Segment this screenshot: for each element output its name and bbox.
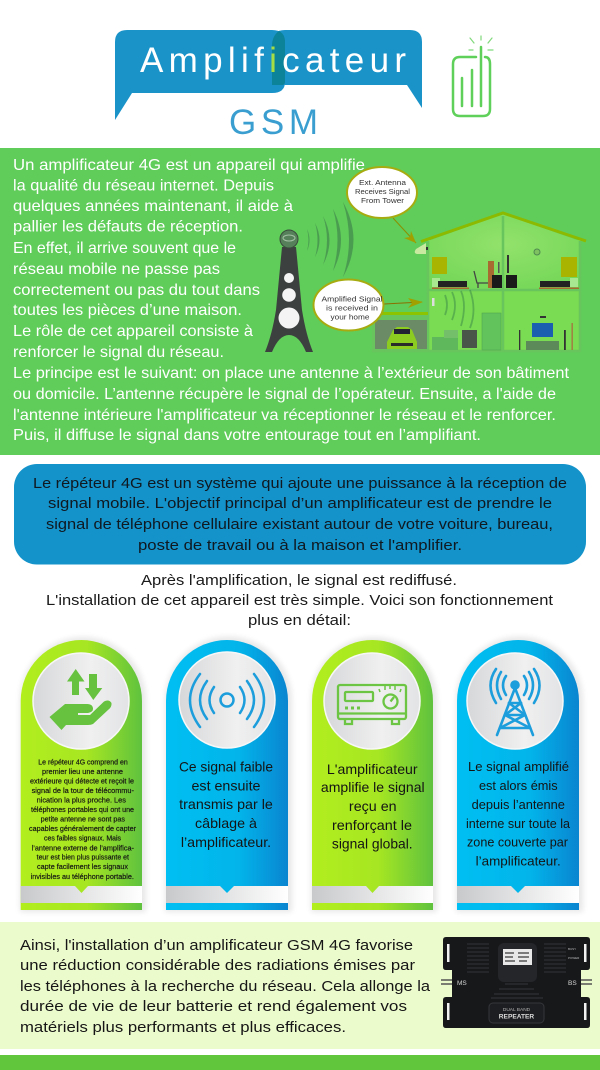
icon: hand with arrows bbox=[50, 669, 112, 730]
conclusion text: les téléphones à la recherche du réseau. Cela allonge la bbox=[20, 978, 431, 995]
card 4 text: zone couverte par bbox=[467, 834, 569, 850]
intro text: correctement ou pas du tout dans bbox=[13, 282, 260, 299]
card 3 text: reçu en bbox=[349, 799, 397, 814]
blue description text: Le répéteur 4G est un système qui ajoute une puissance à la réception de bbox=[33, 475, 567, 492]
card 1 text: nication la plus proche. Les bbox=[37, 795, 126, 804]
card 1 text: teur est bien plus puissante et bbox=[37, 853, 129, 862]
icon: signal bars phone bbox=[453, 36, 493, 116]
card 1: outdoor antenna bbox=[20, 637, 146, 912]
illustration: repeater device: DUAL BAND bbox=[503, 1007, 531, 1013]
intro text: Le rôle de cet appareil consiste à bbox=[13, 323, 253, 340]
port labels: MS bbox=[457, 980, 467, 987]
callout: external antenna: Receives Signal bbox=[355, 187, 410, 196]
speech bubble left bbox=[115, 30, 285, 120]
icon: radio mast bbox=[490, 669, 540, 735]
callout: amplified signal: is received in bbox=[326, 304, 378, 312]
callout: amplified signal: your home bbox=[330, 312, 370, 322]
blue description text: signal de téléphone cellulaire existant autour de votre voiture, bureau, bbox=[46, 516, 553, 533]
card 1 text: Le répéteur 4G comprend en bbox=[38, 757, 128, 766]
card 1 text: petite antenne ne sont pas bbox=[41, 815, 125, 824]
intro text: l'antenne intérieure l'amplificateur va réceptionner le réseau et le renforcer. bbox=[13, 407, 556, 424]
logo: Amplificateur GSM bbox=[115, 30, 422, 142]
intro text: Puis, il diffuse le signal dans votre entourage tout en l’amplifiant. bbox=[13, 427, 481, 444]
card 3 footer band bbox=[312, 886, 433, 903]
intro text: Le principe est le suivant: on place une antenne à l’extérieur de son bâtiment bbox=[13, 365, 570, 382]
conclusion text: matériels plus performants et plus efficaces. bbox=[20, 1019, 346, 1036]
panel: conclusion bbox=[0, 922, 600, 1049]
card 4 text: l’amplificateur. bbox=[476, 854, 561, 868]
conclusion text: une réduction considérable des radiations émises par bbox=[20, 957, 415, 974]
card 1 footer band bbox=[21, 886, 142, 903]
card 3: amplifier bbox=[311, 637, 437, 912]
card 2: weak signal bbox=[165, 636, 292, 912]
card 1 text bbox=[29, 757, 137, 881]
card 1 text: premier lieu une antenne bbox=[42, 767, 123, 776]
text: after amplification: plus en détail: bbox=[248, 612, 351, 629]
blue description text bbox=[33, 475, 567, 554]
card 1 disc bbox=[33, 653, 129, 749]
illustration: repeater device bbox=[441, 937, 592, 1028]
illustration: repeater device: REPEATER bbox=[499, 1014, 534, 1020]
card 1 text: ces faibles signaux. Mais bbox=[44, 834, 121, 843]
garage bbox=[372, 312, 428, 316]
card 3 text bbox=[321, 762, 425, 852]
label plate bbox=[489, 1003, 544, 1023]
living room bbox=[532, 323, 553, 337]
blue description text: poste de travail ou à la maison et l'amplifier. bbox=[138, 537, 462, 554]
illustration: repeater device: POWER bbox=[568, 956, 580, 960]
card 1 text: invisibles au téléphone portable. bbox=[31, 872, 134, 881]
illustration: house bbox=[372, 213, 586, 352]
card 3 disc bbox=[324, 653, 420, 749]
icon: amplifier unit bbox=[338, 685, 406, 724]
intro text: En effet, il arrive souvent que le bbox=[13, 240, 236, 257]
illustration: cell tower bbox=[265, 230, 313, 352]
blue description text: signal mobile. L'objectif principal d’un amplificateur est de prendre le bbox=[48, 495, 552, 512]
card 2 text: Ce signal faible bbox=[179, 760, 273, 774]
illustration: tower signal waves bbox=[307, 202, 354, 277]
footer bar bbox=[0, 1055, 600, 1070]
card 1 text: téléphones portables qui ont une bbox=[31, 805, 134, 814]
card 2 text bbox=[179, 760, 273, 850]
conclusion text bbox=[20, 937, 431, 1036]
bedrooms bbox=[432, 257, 447, 274]
card 1 text: capte facilement les signaux bbox=[37, 862, 128, 871]
intro text: renforcer le signal du réseau. bbox=[13, 344, 224, 361]
card 1 text: l’antenne externe de l’amplifica- bbox=[32, 843, 134, 852]
card 4 text: interne sur toute la bbox=[466, 816, 571, 831]
card 3 text: L'amplificateur bbox=[327, 762, 418, 777]
icon: broadcast waves bbox=[190, 674, 264, 727]
car bbox=[387, 327, 417, 349]
card 4 text: est alors émis bbox=[479, 778, 558, 793]
intro text: pallier les défauts de réception. bbox=[13, 219, 243, 236]
conclusion text: durée de vie de leur batterie et rend également vos bbox=[20, 998, 407, 1015]
indoor signal waves bbox=[445, 290, 474, 328]
card 4 text bbox=[466, 759, 571, 868]
card 3 text: amplifie le signal bbox=[321, 780, 425, 795]
card 2 text: transmis par le bbox=[179, 797, 273, 812]
card 4 footer band bbox=[457, 886, 579, 903]
card 2 footer band bbox=[166, 886, 288, 903]
card 4: amplified signal emission bbox=[456, 636, 583, 912]
card 2 text: l’amplificateur. bbox=[181, 835, 271, 850]
illustration: repeater device: BS bbox=[568, 980, 577, 987]
card 1 text: capables généralement de capter bbox=[29, 824, 137, 833]
card 3 text: renforçant le bbox=[332, 818, 412, 833]
intro text: ou domicile. L’antenne récupère le signal de l’opérateur. Ensuite, a l'aide de bbox=[13, 386, 556, 403]
intro text: toutes les pièces d’une maison. bbox=[13, 302, 242, 319]
intro text bbox=[13, 157, 570, 444]
office bbox=[488, 261, 494, 288]
callout: amplified signal: Amplified Signal bbox=[322, 294, 383, 304]
screen bbox=[498, 943, 537, 982]
card 4 text: Le signal amplifié bbox=[468, 759, 569, 774]
panel: blue description bbox=[14, 464, 586, 564]
callout: external antenna bbox=[347, 167, 417, 243]
intro text: la qualité du réseau internet. Depuis bbox=[13, 178, 274, 195]
vents bbox=[467, 944, 566, 972]
text: after amplification: L'installation de cet appareil est très simple. Voici son fonctionnement bbox=[46, 592, 554, 609]
bubble overlap bbox=[272, 31, 285, 85]
intro text: réseau mobile ne passe pas bbox=[13, 261, 220, 278]
card 1 text: extérieure qui détecte et reçoit le bbox=[30, 776, 134, 785]
card 1 text: signal de la tour de télécommu- bbox=[32, 786, 134, 795]
card 4 text: depuis l’antenne bbox=[472, 797, 565, 812]
callout: external antenna: Ext. Antenna bbox=[359, 178, 407, 187]
conclusion text: Ainsi, l'installation d’un amplificateur GSM 4G favorise bbox=[20, 937, 413, 954]
card 2 text: câblage à bbox=[195, 816, 257, 831]
card 2 text: est ensuite bbox=[192, 778, 261, 794]
callout: external antenna: From Tower bbox=[361, 196, 404, 205]
antennas bbox=[415, 243, 426, 254]
logo wordmark: Amplificateur bbox=[140, 41, 406, 80]
card 2 disc bbox=[179, 652, 275, 748]
intro text: Un amplificateur 4G est un appareil qui amplifie bbox=[13, 157, 365, 174]
illustration: repeater device: BUSY bbox=[568, 947, 576, 951]
speech bubble right bbox=[272, 30, 422, 108]
callout: amplified signal bbox=[314, 280, 423, 330]
text: after amplification bbox=[46, 572, 554, 629]
intro text: quelques années maintenant, il aide à bbox=[13, 198, 293, 215]
logo GSM: GSM bbox=[229, 103, 318, 142]
card 3 text: signal global. bbox=[332, 836, 413, 852]
panel: green intro bbox=[0, 148, 600, 455]
card 4 disc bbox=[467, 653, 563, 749]
kitchen bbox=[482, 313, 501, 350]
text: after amplification: Après l'amplification, le signal est rediffusé. bbox=[141, 572, 457, 589]
roof bbox=[421, 213, 586, 242]
